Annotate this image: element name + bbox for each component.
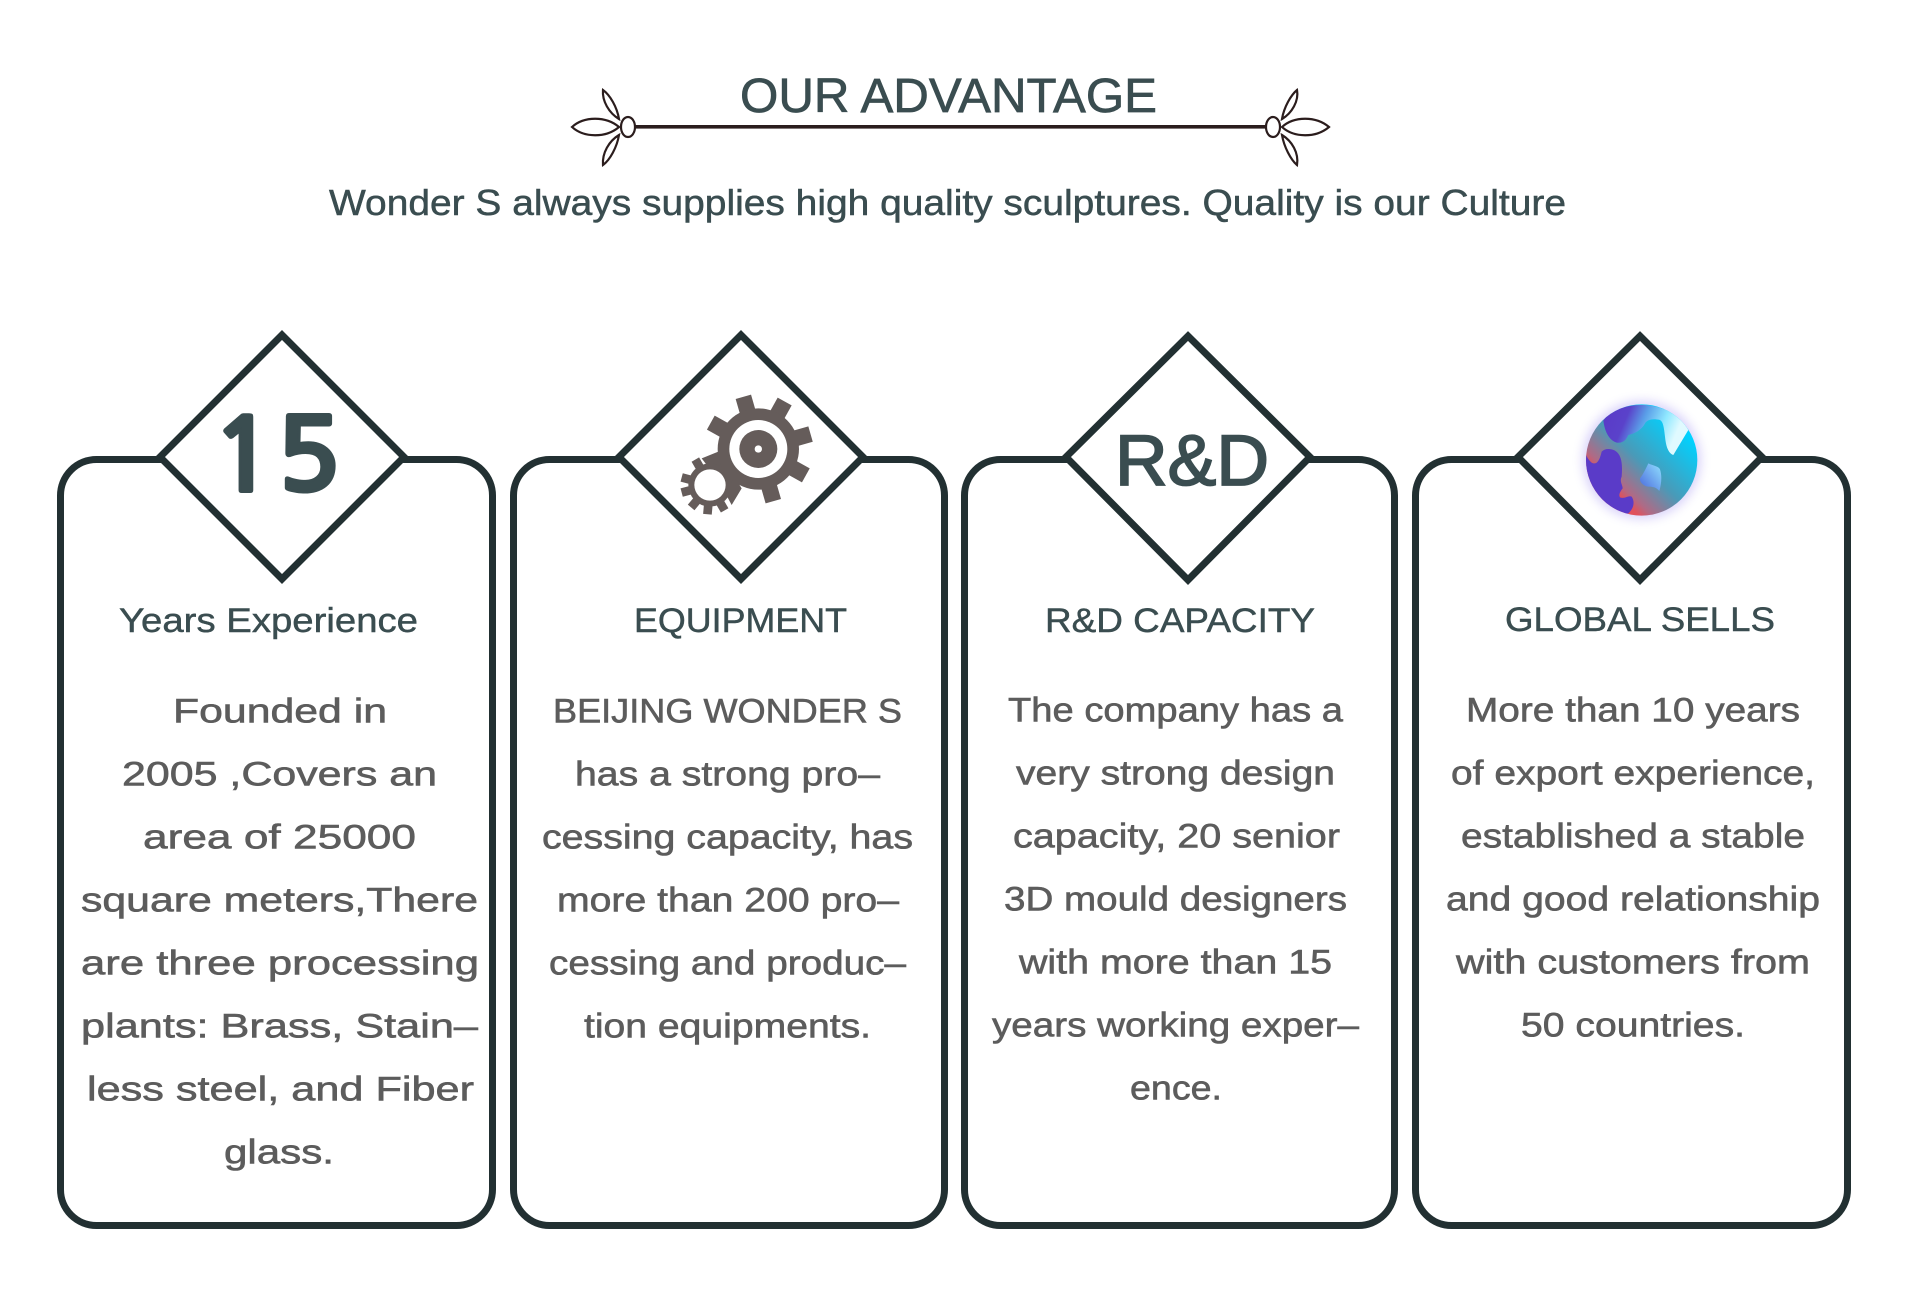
title: OUR ADVANTAGE	[740, 70, 1157, 123]
card heading: R&D CAPACITY	[1045, 602, 1315, 640]
panel: years experience	[60, 335, 492, 1226]
card body text: more than 200 pro–	[557, 882, 899, 920]
card body text: with customers from	[1455, 944, 1810, 982]
card body text	[542, 693, 913, 1046]
subtitle: Wonder S always supplies high quality sculptures. Quality is our Culture	[329, 182, 1566, 223]
diamond badge	[160, 335, 404, 579]
card frame	[1416, 460, 1848, 1226]
card body text: ence.	[1130, 1070, 1222, 1108]
card body text: The company has a	[1008, 692, 1343, 730]
card body text: cessing capacity, has	[542, 819, 913, 857]
card body text: established a stable	[1461, 818, 1805, 856]
card body text: of export experience,	[1451, 755, 1815, 793]
card body text	[992, 692, 1359, 1108]
card body text: 2005 ,Covers an	[122, 756, 437, 794]
card body text: cessing and produc–	[549, 945, 906, 983]
icon: globe	[1573, 401, 1701, 520]
card body text: very strong design	[1016, 755, 1335, 793]
card body text	[1446, 692, 1820, 1045]
card body text: capacity, 20 senior	[1013, 818, 1340, 856]
card body text: 3D mould designers	[1004, 881, 1347, 919]
card frame	[964, 460, 1394, 1226]
card body text: years working exper–	[992, 1007, 1359, 1045]
card heading: Years Experience	[119, 602, 418, 640]
card body text: and good relationship	[1446, 881, 1820, 919]
diamond badge	[1518, 336, 1762, 580]
badge text: R&D	[1115, 422, 1269, 501]
icon: gears	[681, 395, 813, 515]
panel: R&D capacity	[964, 336, 1394, 1226]
card body text: tion equipments.	[584, 1008, 871, 1046]
card frame	[514, 460, 944, 1226]
title ornament divider	[572, 90, 1329, 165]
card heading: GLOBAL SELLS	[1505, 601, 1775, 639]
card body text: BEIJING WONDER S	[553, 693, 902, 731]
card body text	[81, 693, 479, 1172]
card body text: with more than 15	[1018, 944, 1332, 982]
card body text: are three processing	[81, 945, 479, 983]
card frame	[60, 460, 492, 1226]
card heading: EQUIPMENT	[634, 602, 847, 640]
badge number: 15	[211, 407, 341, 507]
card body text: glass.	[224, 1134, 334, 1172]
card body text: square meters,There	[81, 882, 478, 920]
panel: global sells	[1416, 336, 1848, 1226]
card body text: 50 countries.	[1521, 1007, 1745, 1045]
card body text: area of 25000	[143, 819, 416, 857]
card body text: Founded in	[173, 693, 387, 731]
diamond badge	[619, 335, 863, 579]
card body text: plants: Brass, Stain–	[81, 1008, 478, 1046]
diamond badge	[1066, 336, 1310, 580]
card body text: less steel, and Fiber	[87, 1071, 474, 1109]
card body text: has a strong pro–	[575, 756, 880, 794]
card body text: More than 10 years	[1466, 692, 1800, 730]
panel: equipment	[514, 335, 944, 1226]
